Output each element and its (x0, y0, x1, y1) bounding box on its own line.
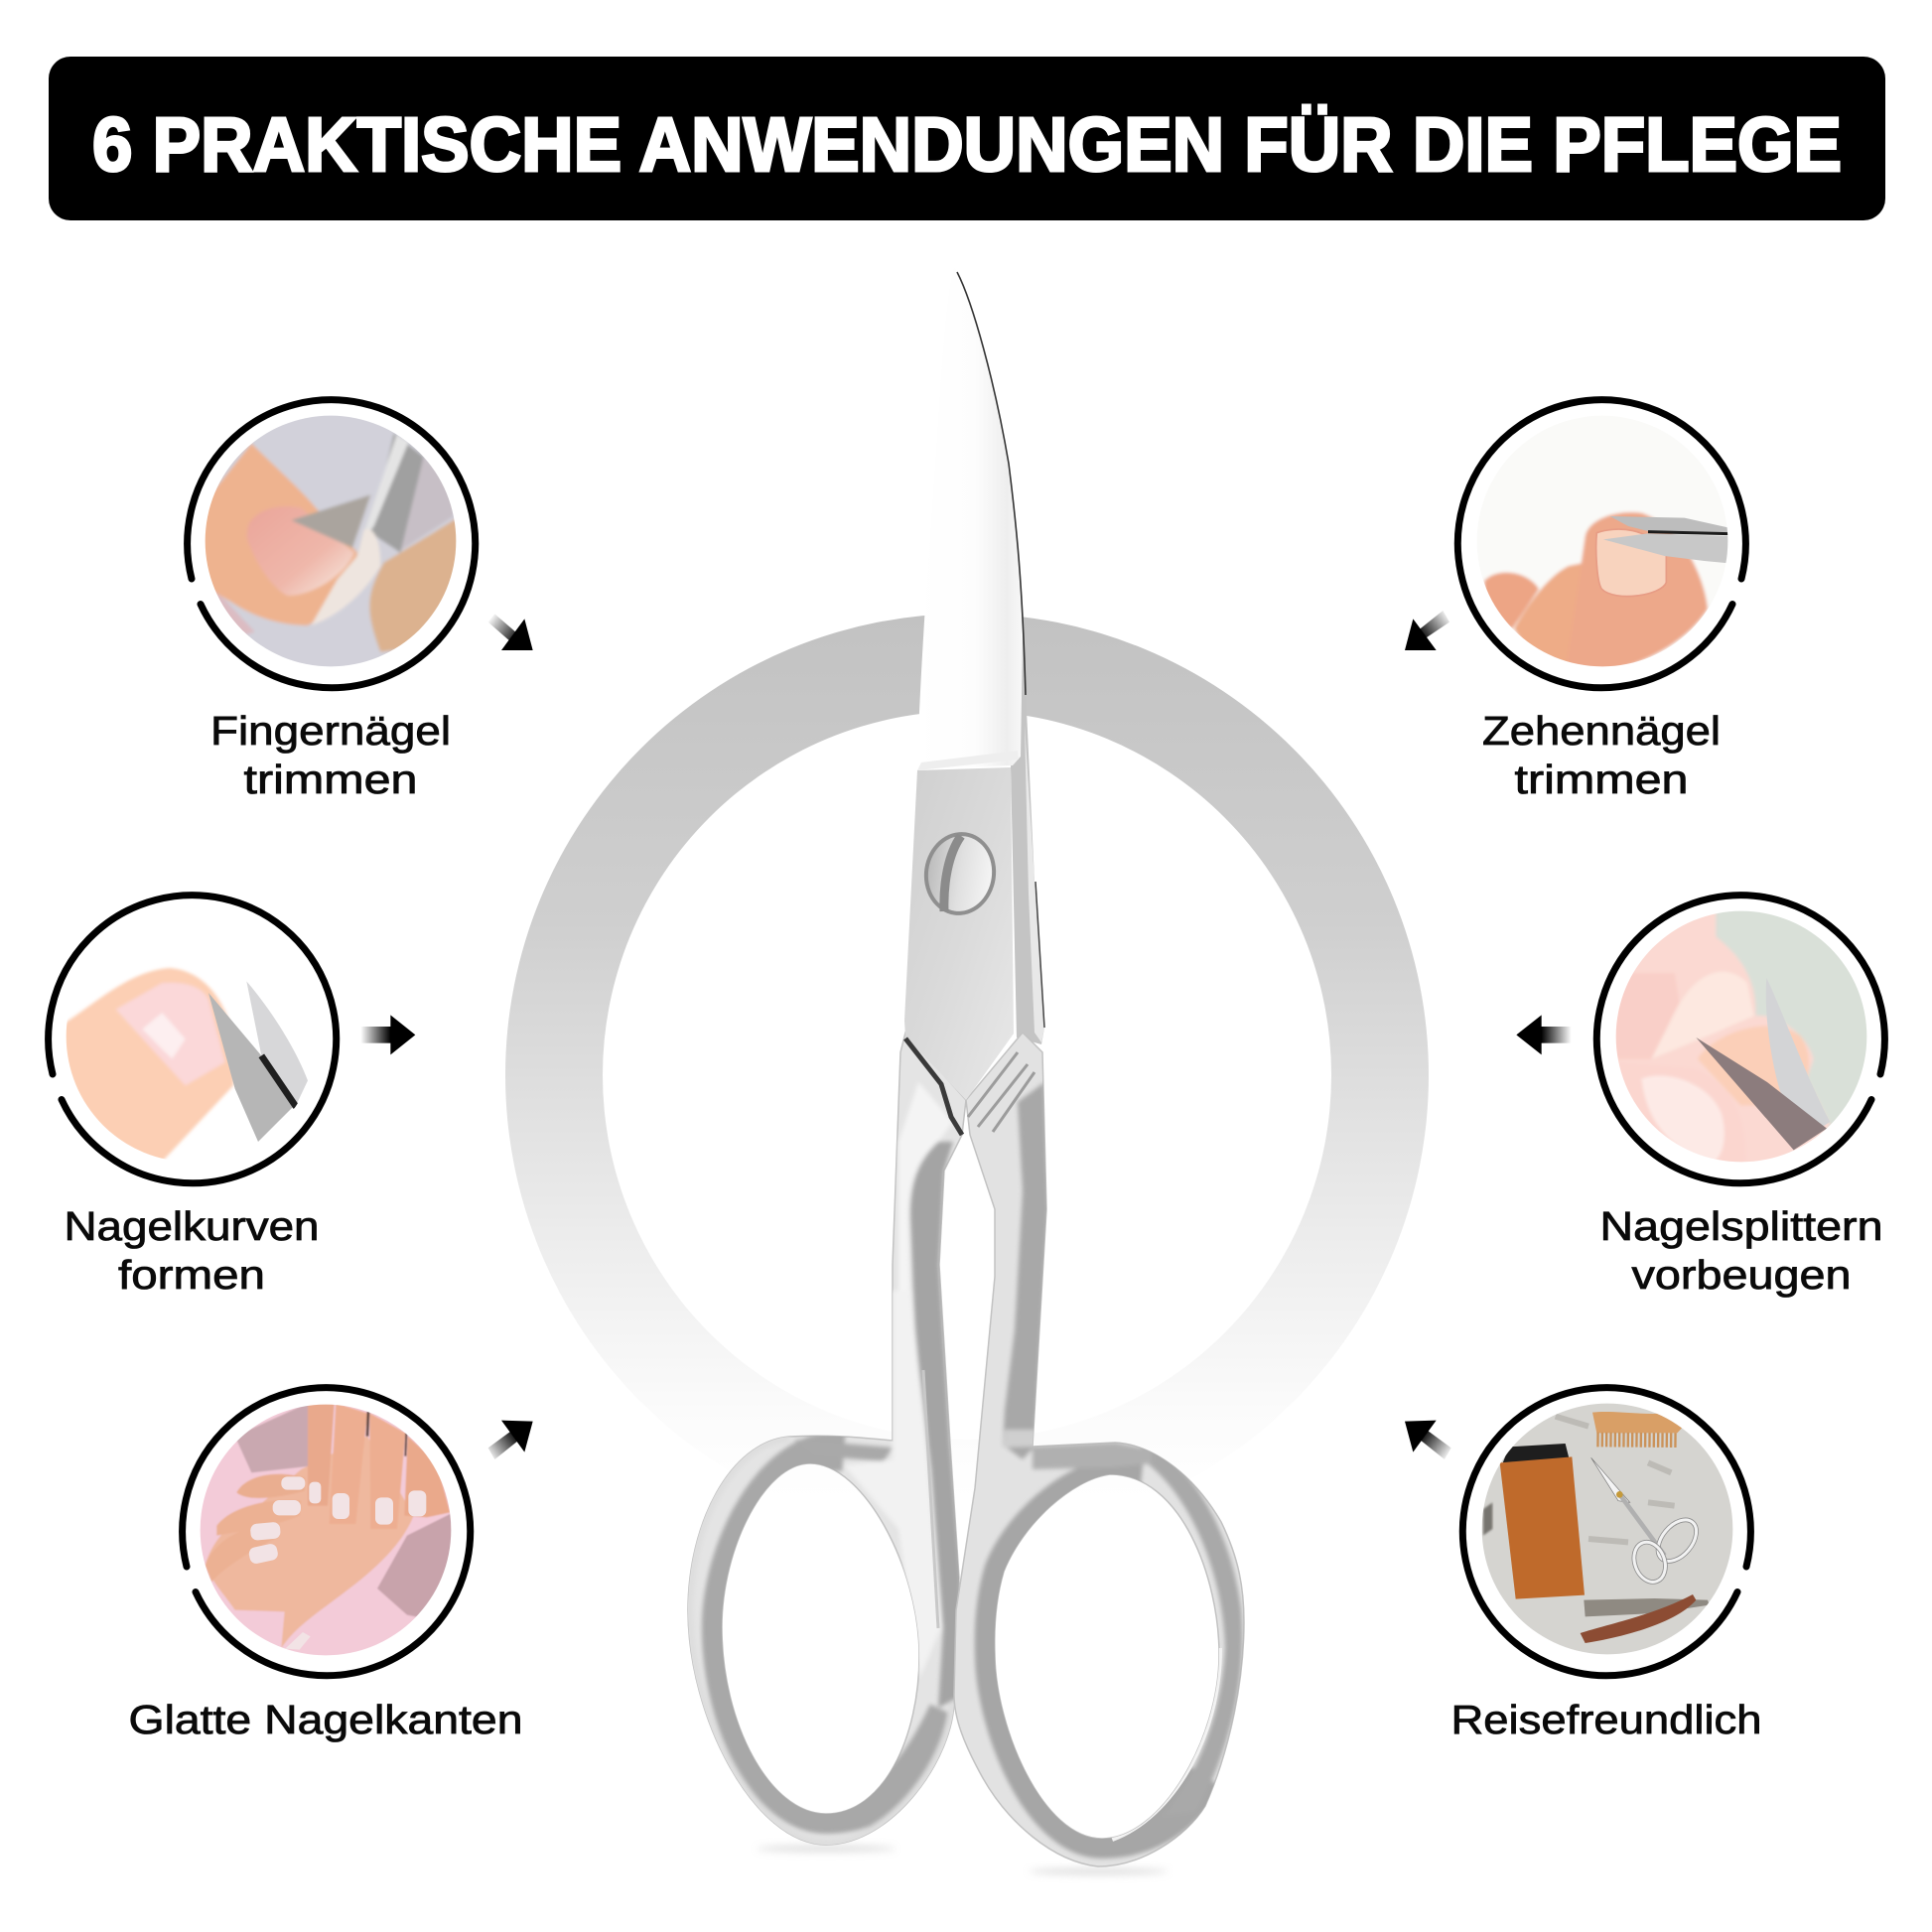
icon: photo nail splinter (1611, 906, 1873, 1169)
icon: photo nail curve (63, 968, 308, 1162)
label: Glatte Nagelkanten (129, 1697, 522, 1742)
icon: photo manicured hands (197, 1402, 457, 1660)
icon: ring (188, 400, 476, 688)
label: Reisefreundlich (1451, 1697, 1761, 1742)
icon: ring (183, 1388, 471, 1676)
panel: Glatte Nagelkanten (129, 1388, 522, 1742)
label: Fingernägel (210, 708, 451, 754)
arrow: from Fingernägel (488, 614, 533, 650)
icon: ring (1462, 1388, 1750, 1676)
product: nail scissors (688, 267, 1244, 1874)
panel: Zehennägel trimmen (1457, 400, 1745, 802)
title text: 6 PRAKTISCHE ANWENDUNGEN FÜR DIE PFLEGE (92, 102, 1842, 188)
scissors shadow (757, 1846, 1168, 1874)
panel: Fingernägel trimmen (188, 400, 476, 802)
arrow: from Glatte Nagelkanten (488, 1421, 533, 1459)
label line 2: trimmen (244, 757, 417, 802)
title banner (49, 57, 1885, 220)
label line 2: formen (118, 1252, 265, 1298)
label: Nagelkurven (64, 1203, 320, 1249)
icon: ring (1457, 400, 1745, 688)
label: Zehennägel (1482, 708, 1721, 754)
label line 2: trimmen (1515, 757, 1688, 802)
arrow: from Reisefreundlich (1405, 1421, 1451, 1459)
label line 2: vorbeugen (1632, 1252, 1851, 1298)
icon: photo toenail (1483, 508, 1727, 667)
upper blade (917, 267, 1023, 768)
pivot screw (919, 827, 1001, 920)
icon: photo travel kit (1479, 1402, 1737, 1660)
panel: Nagelsplittern vorbeugen (1596, 896, 1884, 1298)
pivot plate (904, 767, 1014, 1100)
left handle (688, 1033, 966, 1845)
panel: Reisefreundlich (1451, 1388, 1761, 1742)
arrow: from Nagelkurven (360, 1015, 415, 1054)
icon: photo fingernail (205, 415, 457, 667)
panel: Nagelkurven formen (49, 896, 337, 1298)
arrow: from Zehennägel (1405, 611, 1449, 650)
arrow: from Nagelsplittern (1516, 1015, 1572, 1054)
rear blade edge strip (1011, 606, 1044, 1044)
label: Nagelsplittern (1600, 1203, 1882, 1249)
icon: ring (49, 896, 337, 1183)
icon: ring (1596, 896, 1884, 1183)
background gradient ring (505, 614, 1429, 1537)
right handle (954, 1033, 1244, 1866)
